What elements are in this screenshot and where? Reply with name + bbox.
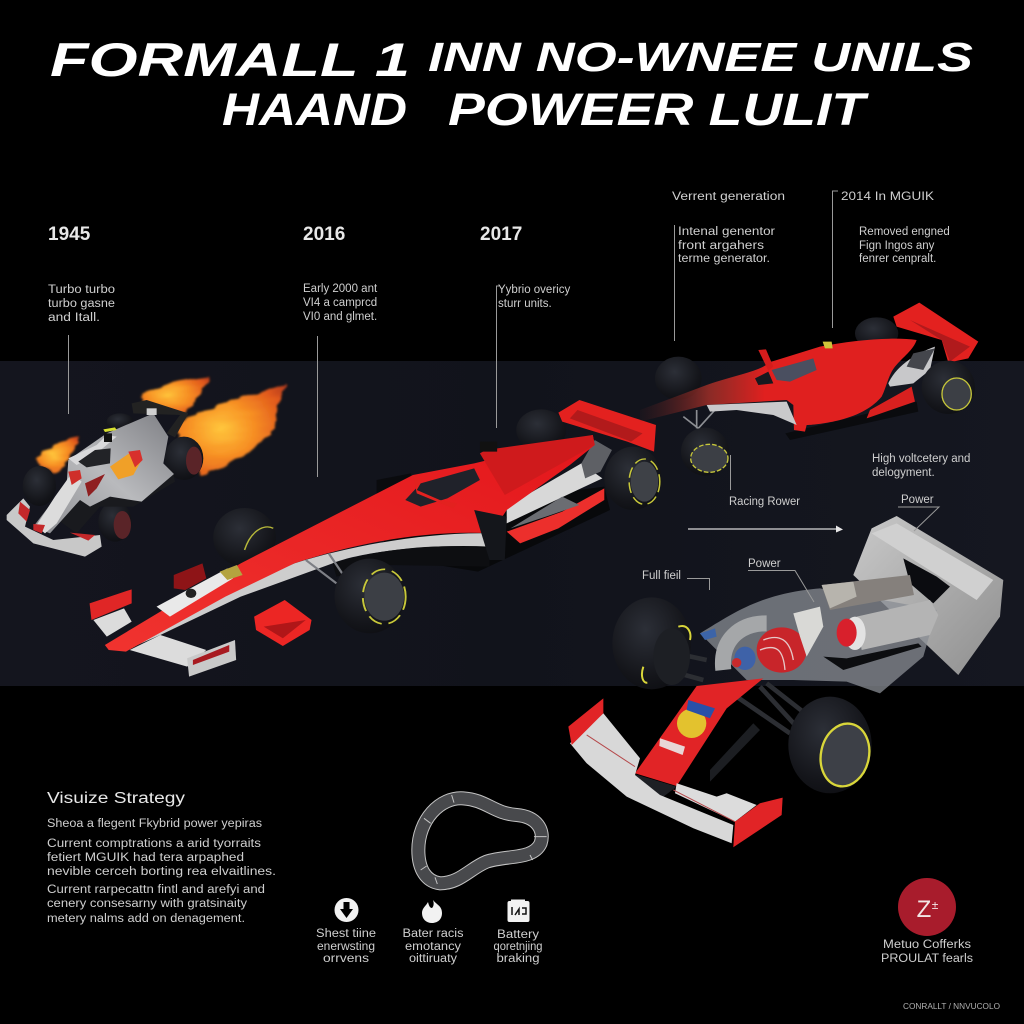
logo badge: ± [932,898,939,912]
engine [110,452,142,479]
timeline entry 2016: 2016 [303,224,345,245]
far tires [213,409,566,567]
white sidepod [507,463,602,523]
timeline entry 2017: 2017 [480,224,522,245]
timeline entry 2017: sturr units. [498,298,552,310]
timeline entry 2014: fenrer cenpralt. [859,253,936,265]
timeline entry 2017: Yybrio overicy [498,284,570,296]
tires [655,317,898,400]
cockpit [772,358,817,382]
track map [418,795,547,884]
annotation: racing power [729,455,800,508]
text block: visualize strategy: nevible cerceh borting rea elvaitlines. [47,866,276,878]
flames [37,377,287,474]
front wing [570,713,733,843]
icon caption: better race: emotancy [405,941,461,953]
timeline entry 1945: and Itall. [48,312,100,324]
car: 2016 long red car [90,400,662,677]
timeline entry 2014 [832,191,950,328]
annotation: full field [642,570,710,590]
timeline entry current generation: Verrent generation [672,191,785,203]
near tires [922,361,975,414]
timeline entry 2014: Removed engned [859,226,950,238]
title: HAAND [222,84,407,135]
icon: arrow down circle [334,898,358,922]
rear wing [893,303,978,363]
text block: visualize strategy: Visuize Strategy [47,790,185,807]
icon caption: better race: Bater racis [402,928,464,940]
text block: visualize strategy: metery nalms add on denagement. [47,913,245,925]
rear wing [853,516,1003,675]
rear wing [132,400,188,437]
icon caption: battery: Battery [497,929,539,941]
timeline entry 1945: Turbo turbo [48,284,115,296]
timeline entry 2017 [480,224,570,428]
nose [635,678,763,786]
rear wing [558,400,656,452]
annotation: power lower [748,558,814,602]
text block: visualize strategy: Current comptrations a arid tyorraits [47,838,261,850]
bargeboard [474,510,507,560]
central red drum [757,627,807,673]
icon caption: battery: qoretnjing [494,941,542,953]
front wing [90,589,132,620]
logo badge: Metuo Cofferks [883,939,971,951]
exhaust cylinder [857,600,938,650]
transparent body [700,588,937,693]
car: current generation red car [640,303,978,476]
text block: visualize strategy: cenery consesarny with gratsinaity [47,898,247,910]
footer credit: CONRALLT / NNVUCOLO [903,1002,1000,1011]
icon caption: battery [494,929,542,965]
icon caption: better race [402,928,464,965]
timeline entry 2016: VI0 and glmet. [303,311,377,323]
upper engine [822,575,914,610]
suspension [683,410,715,428]
timeline entry 1945: turbo gasne [48,298,115,310]
body [640,339,917,432]
title: INN NO-WNEE UNILS [428,34,973,80]
annotation: power top [898,494,939,531]
timeline entry current generation: front argahers [678,240,764,252]
nose white section [157,568,233,617]
annotation: high voltage: High voltcetery and [872,453,970,465]
cockpit [405,468,480,507]
timeline entry 2014: 2014 In MGUIK [841,191,934,203]
front wing pieces [174,563,206,590]
title: POWEER LULIT [448,84,869,135]
red floor fin [507,488,604,543]
annotation: high voltage: delogyment. [872,467,935,479]
text block: visualize strategy [47,790,276,925]
logo badge: Z [917,896,931,923]
timeline entry 1945 [48,224,115,414]
title: FORMALL 1 [50,33,410,86]
timeline entry current generation [672,191,785,341]
rear tire [604,447,662,510]
icon caption: short time: Shest tiine [316,928,376,940]
front tires [612,597,691,689]
text block: visualize strategy: fetiert MGUIK had tera arpaphed [47,852,244,864]
car: 1945 silver car with flames [7,377,287,557]
icon caption: short time: orrvens [323,953,369,965]
icon: flame [422,900,442,923]
logo badge: PROULAT fearls [881,953,973,965]
icon caption: short time [316,928,376,965]
timeline entry 1945: 1945 [48,224,91,245]
timeline entry 2014: Fign Ingos any [859,240,935,252]
icon caption: short time: enerwsting [317,941,375,953]
icon caption: better race: oittiruaty [409,953,457,965]
timeline entry current generation: terme generator. [678,253,770,265]
intake tube [723,623,767,670]
annotation: power top: Power [901,494,934,506]
timeline entry 2016: VI4 a camprcd [303,297,377,309]
car: cutaway hybrid power unit [568,516,1003,847]
body [53,463,175,533]
suspension [660,650,805,733]
front tire [334,559,405,633]
annotation: racing power: Racing Rower [729,496,800,508]
floor [379,487,610,572]
timeline entry current generation: Intenal genentor [678,226,775,238]
text block: visualize strategy: Current rarpecattn fintl and arefyi and [47,884,265,896]
red upper body [105,435,595,652]
suspension arms [306,553,342,583]
annotation: high voltage [872,453,970,479]
annotation: full field: Full fieil [642,570,681,582]
logo badge [881,878,973,965]
timeline entry 2016: Early 2000 ant [303,283,378,295]
floor [785,402,918,440]
front wing [7,498,102,557]
icon: battery [508,900,530,922]
arrow: racing power direction [688,526,843,532]
exhaust region [888,347,935,387]
lower white floor [130,533,491,648]
tires [23,413,203,542]
text block: visualize strategy: Sheoa a flegent Fkybrid power yepiras [47,818,262,830]
title [50,33,973,135]
timeline entry 2016 [303,224,378,477]
annotation: power lower: Power [748,558,781,570]
icon caption: battery: braking [496,953,540,965]
